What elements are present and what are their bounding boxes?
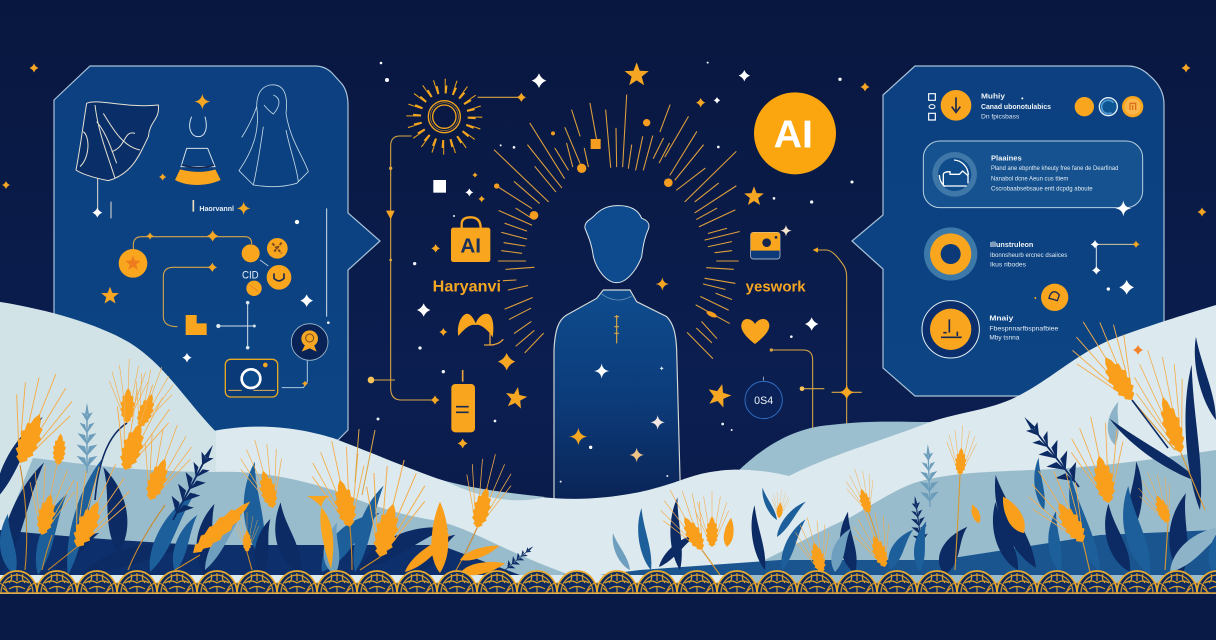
hills: right valley (730, 450, 1216, 600)
connector: white cross (217, 208, 327, 349)
list row: download item: Fbespnnarfbspnafbiee (989, 326, 1059, 332)
hills: left slope (0, 302, 216, 640)
card: highlighted item: Pland ane ebpnthe kheuty free fane de Dearfinad (991, 166, 1118, 172)
icon: AI shopping bag: AI (460, 235, 481, 258)
icon: star badge (119, 249, 147, 278)
icon: sparkle star (194, 94, 210, 110)
connector: right lines (770, 247, 862, 473)
label: Haryanvi: Haryanvi (433, 279, 501, 296)
hills: pale strip below ridge (445, 481, 545, 500)
icon: battery (451, 370, 475, 448)
label: yeswork: yeswork (746, 279, 806, 296)
plants: right wheat (652, 307, 1205, 577)
list row: ring item: Illunstruleon (990, 240, 1034, 249)
icon: AI shopping bag (451, 217, 490, 262)
radiating rays (494, 95, 739, 358)
plants: right leaves (600, 337, 1216, 584)
icon: necklace (190, 117, 206, 137)
card: highlighted item: Plaaines (991, 153, 1022, 162)
hills: main white ridge (0, 305, 1216, 640)
icon: heart (741, 319, 769, 344)
icon cluster: circles: CID (242, 269, 259, 281)
card: highlighted item: Cscrobaabsebsaue entt dcpdg aboute (991, 186, 1093, 192)
icon: camera (225, 359, 278, 397)
AI badge (754, 92, 836, 174)
hills: left slope tint (0, 302, 216, 520)
icon: white square (433, 180, 446, 193)
caption (193, 200, 250, 215)
list row: ring item: Ikus ribodes (990, 262, 1026, 268)
stars on person and around (385, 62, 852, 483)
ray nodes (494, 119, 718, 319)
connector: white nodes (1091, 240, 1140, 295)
list row: download item (922, 301, 1059, 358)
icon: circle with code (745, 377, 782, 419)
icon cluster: circles (242, 238, 291, 296)
icon: circle with code: 0S4 (754, 395, 773, 407)
icon: small head badge (1034, 284, 1068, 311)
decorative scallop band (0, 569, 1216, 594)
card: highlighted item: Nanabol dcne Aeun cus ttiem (991, 177, 1068, 183)
process connector lines (133, 237, 252, 327)
icon: medal badge (291, 324, 328, 360)
plants: left wheat (0, 358, 518, 578)
hills: back light-blue hill (737, 422, 935, 505)
panel: right details (852, 66, 1164, 396)
connector: left vertical line to battery (368, 136, 440, 405)
plants: left leaves (0, 403, 537, 588)
list row: top summary: Dn fpicsbass (981, 115, 1019, 121)
list row: top summary (929, 90, 1143, 121)
card: highlighted item (923, 141, 1143, 216)
central scene (368, 62, 862, 503)
hills: left valley (0, 458, 570, 575)
background stars (2, 62, 1206, 420)
list row: top summary: Muhiy (981, 92, 1006, 101)
icon: L block (186, 315, 207, 335)
icon: saree drape (76, 102, 159, 218)
person silhouette (554, 206, 681, 503)
icon: cloak (239, 85, 308, 187)
arrow: sun to right (478, 93, 526, 102)
list row: top summary: Canad ubonotulabics (981, 104, 1051, 111)
icon: sun (410, 82, 479, 151)
AI badge: AI (774, 112, 813, 156)
icon: orange camera (751, 225, 792, 259)
bottom navy strip (0, 594, 1216, 640)
icon: book headdress (458, 314, 503, 345)
caption: Haorvannl (199, 204, 234, 213)
list row: download item: Mnaiy (989, 313, 1014, 322)
panel: left clothing and process (54, 66, 380, 440)
list row: ring item: Ibonnsheurb ercnec dsaiices (990, 253, 1067, 259)
list row: download item: Mby tsnna (989, 336, 1020, 342)
icon: skirt (175, 148, 221, 185)
list row: ring item (924, 227, 1067, 281)
